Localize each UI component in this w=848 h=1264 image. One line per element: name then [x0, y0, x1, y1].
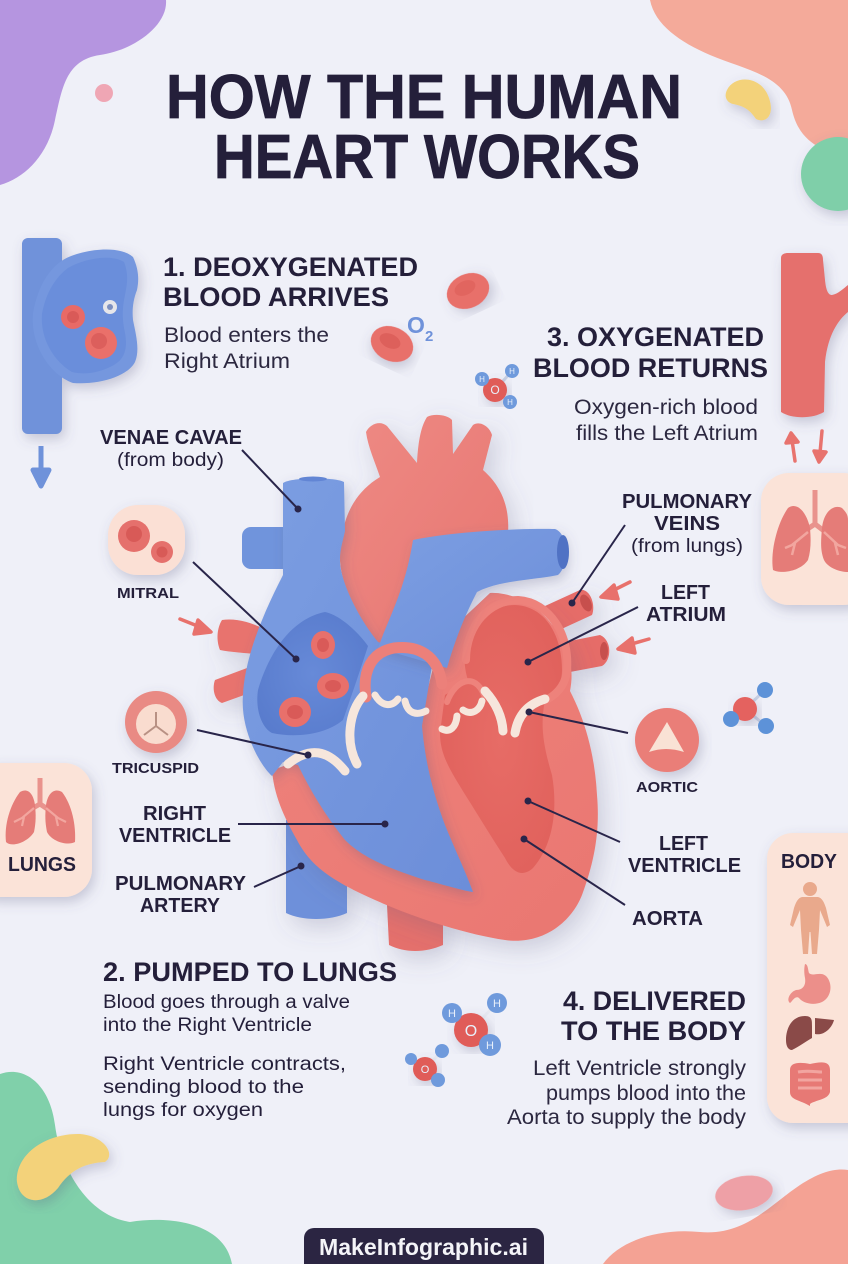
callout: aortic valve: AORTIC	[636, 779, 698, 796]
label: aorta	[520, 836, 703, 930]
step 4 text: TO THE BODY	[561, 1016, 746, 1046]
label: left atrium	[524, 582, 726, 666]
right atrium chamber	[257, 612, 368, 735]
step 1 text: BLOOD ARRIVES	[163, 282, 389, 312]
step 3 text	[533, 322, 768, 445]
step 4 text: Aorta to supply the body	[507, 1106, 747, 1129]
label: pulmonary veins: PULMONARY	[622, 491, 753, 513]
decorative bean: yellow	[726, 80, 771, 120]
label: pulmonary artery: PULMONARY	[115, 873, 247, 895]
callout: mitral valve	[108, 505, 300, 662]
step 1 text: Blood enters the	[164, 324, 329, 347]
label: right ventricle: RIGHT	[143, 803, 206, 825]
panel: lungs right	[761, 473, 848, 605]
step 4 text: Left Ventricle strongly	[533, 1057, 747, 1080]
icon: stomach	[788, 964, 831, 1004]
icon: liver	[786, 1016, 834, 1050]
heart outer wall	[272, 593, 598, 941]
label: left ventricle: LEFT	[659, 833, 708, 855]
step 3 text: 3. OXYGENATED	[547, 322, 764, 352]
footer badge: MakeInfographic.ai	[319, 1234, 528, 1260]
panel: body organs	[767, 833, 848, 1123]
step 2 text: 2. PUMPED TO LUNGS	[103, 957, 397, 987]
ventricular arch	[365, 647, 442, 697]
label: left ventricle: VENTRICLE	[628, 855, 741, 877]
icon: blood cells and O2	[365, 266, 495, 369]
step 1 text: Right Atrium	[164, 350, 290, 373]
molecule: water large	[442, 993, 507, 1056]
label: venae cavae	[100, 427, 302, 512]
title	[166, 63, 682, 192]
step 3 text: Oxygen-rich blood	[574, 396, 758, 419]
callout: aortic valve	[526, 708, 699, 796]
step 3 text: fills the Left Atrium	[576, 422, 758, 445]
blue branch left	[242, 527, 302, 569]
step 2 text: Right Ventricle contracts,	[103, 1054, 346, 1075]
step 1 text	[163, 252, 418, 373]
callout: tricuspid valve	[112, 691, 312, 777]
label: left ventricle	[524, 798, 741, 877]
icon: small molecule top	[475, 364, 519, 409]
molecule: water large: H	[448, 1008, 456, 1020]
step 3 text: BLOOD RETURNS	[533, 353, 768, 383]
label: venae cavae: (from body)	[117, 450, 224, 471]
label: left atrium: LEFT	[661, 582, 710, 604]
venae cava opening	[299, 476, 327, 482]
decorative blob: salmon bottom right	[603, 1170, 848, 1264]
molecule: water large: O	[465, 1023, 477, 1040]
step 2 text: Blood goes through a valve	[103, 992, 350, 1013]
panel: lungs left	[0, 763, 92, 897]
decorative blob: purple top left	[0, 0, 166, 185]
step 2 text: sending blood to the	[103, 1077, 304, 1098]
decorative dot: pink	[95, 84, 113, 102]
molecule: water large: H	[486, 1040, 494, 1052]
vessels behind heart	[214, 590, 609, 951]
label: aorta: AORTA	[632, 908, 703, 930]
icon: small molecule top: H	[479, 375, 485, 384]
step 3 icon: red vessel	[781, 253, 848, 417]
molecule: right	[723, 682, 774, 734]
arrows: pulmonary vein flow	[180, 582, 649, 653]
label: left atrium: ATRIUM	[646, 604, 726, 626]
step 4 text: 4. DELIVERED	[563, 986, 746, 1016]
arrows: up and down red	[786, 431, 826, 462]
valves	[288, 691, 545, 771]
title: HEART WORKS	[214, 123, 640, 192]
label: pulmonary veins: VEINS	[654, 513, 720, 535]
icon: blood cells and O2: 2	[425, 328, 433, 345]
left atrium rim	[466, 600, 567, 699]
left heart chamber	[440, 605, 562, 873]
aortic arch	[340, 415, 508, 650]
label: lungs: LUNGS	[8, 854, 76, 876]
step 1 text: 1. DEOXYGENATED	[163, 252, 418, 282]
label: pulmonary veins	[568, 491, 753, 606]
icon: small molecule top: O	[490, 383, 500, 397]
step 4 text: pumps blood into the	[546, 1082, 746, 1105]
molecule: water small	[405, 1044, 449, 1087]
pulmonary trunk	[378, 529, 566, 668]
blue body: venae cava, right atrium and right ventricle	[243, 478, 473, 892]
step 2 text: into the Right Ventricle	[103, 1015, 312, 1036]
label: right ventricle	[119, 803, 388, 847]
callout: mitral valve: MITRAL	[117, 585, 179, 602]
label: venae cavae: VENAE CAVAE	[100, 427, 242, 449]
decorative circle: green	[801, 137, 848, 211]
decorative blob: green bottom left	[0, 1072, 232, 1264]
label: pulmonary artery	[115, 862, 304, 917]
heart diagram	[214, 415, 609, 951]
interior flap	[447, 681, 484, 702]
icon: blood cells and O2: O	[407, 312, 425, 338]
icon: intestine	[790, 1062, 830, 1106]
label: pulmonary artery: ARTERY	[140, 895, 221, 917]
callout: tricuspid valve: TRICUSPID	[112, 760, 199, 777]
icon: person	[790, 882, 830, 954]
step 2 text	[103, 957, 397, 1121]
label: body: BODY	[781, 851, 838, 873]
icon: small molecule top: H	[507, 398, 513, 407]
title: HOW THE HUMAN	[166, 63, 682, 132]
decorative blob: salmon top right	[650, 0, 848, 160]
step 1 icon: right atrium model	[22, 238, 138, 434]
label: pulmonary veins: (from lungs)	[631, 536, 743, 557]
decorative bean: yellow bottom	[17, 1134, 109, 1200]
arrow: down blue	[33, 446, 49, 486]
icon: small molecule top: H	[509, 367, 515, 376]
step 2 text: lungs for oxygen	[103, 1100, 263, 1121]
decorative bean: pink bottom	[712, 1171, 776, 1215]
footer badge	[304, 1228, 544, 1264]
molecule: water small: O	[421, 1064, 430, 1076]
label: right ventricle: VENTRICLE	[119, 825, 231, 847]
step 4 text	[507, 986, 747, 1129]
red blood cells in right atrium	[279, 631, 349, 727]
molecule: water large: H	[493, 998, 501, 1010]
